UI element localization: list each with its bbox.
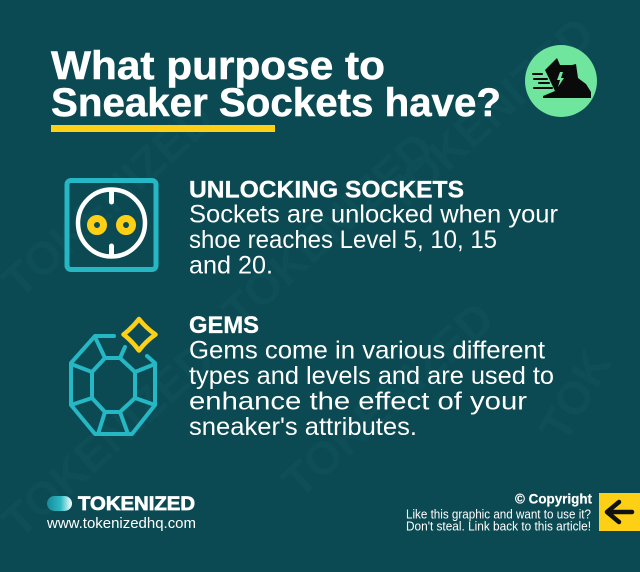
icon: gem: [71, 319, 156, 434]
section: unlocking sockets: Sockets are unlocked when your: [189, 200, 558, 228]
section: gems: GEMS: [189, 312, 259, 339]
website url: www.tokenizedhq.com: [46, 515, 196, 532]
copyright note: Don't steal. Link back to this article!: [406, 520, 591, 534]
copyright note: Like this graphic and want to use it?: [406, 508, 591, 522]
arrow button: [599, 493, 640, 531]
section: gems: types and levels and are used to: [189, 362, 554, 390]
icon: power socket: [67, 180, 156, 270]
section: gems: enhance the effect of your: [189, 388, 527, 416]
section: unlocking sockets: [189, 176, 558, 280]
text: TOKENIZED: [212, 121, 444, 337]
title: [51, 44, 501, 125]
section: unlocking sockets: shoe reaches Level 5, 10, 15: [189, 226, 497, 254]
icon: running sneaker badge: [525, 45, 597, 117]
section: unlocking sockets: UNLOCKING SOCKETS: [189, 176, 464, 204]
section: gems: sneaker's attributes.: [189, 413, 417, 441]
copyright note: © Copyright: [515, 490, 592, 506]
text: TOKENIZED: [272, 291, 504, 507]
copyright note: [406, 490, 592, 534]
title: Sneaker Sockets have?: [51, 81, 501, 125]
text: TOK: [529, 341, 622, 450]
title: What purpose to: [51, 44, 385, 88]
section: unlocking sockets: and 20.: [189, 252, 273, 280]
section: gems: [189, 312, 554, 441]
text: TOKENIZED: [372, 6, 604, 222]
logo: tokenized: TOKENIZED: [78, 494, 195, 515]
section: gems: Gems come in various different: [189, 336, 545, 364]
title underline: [51, 125, 275, 132]
